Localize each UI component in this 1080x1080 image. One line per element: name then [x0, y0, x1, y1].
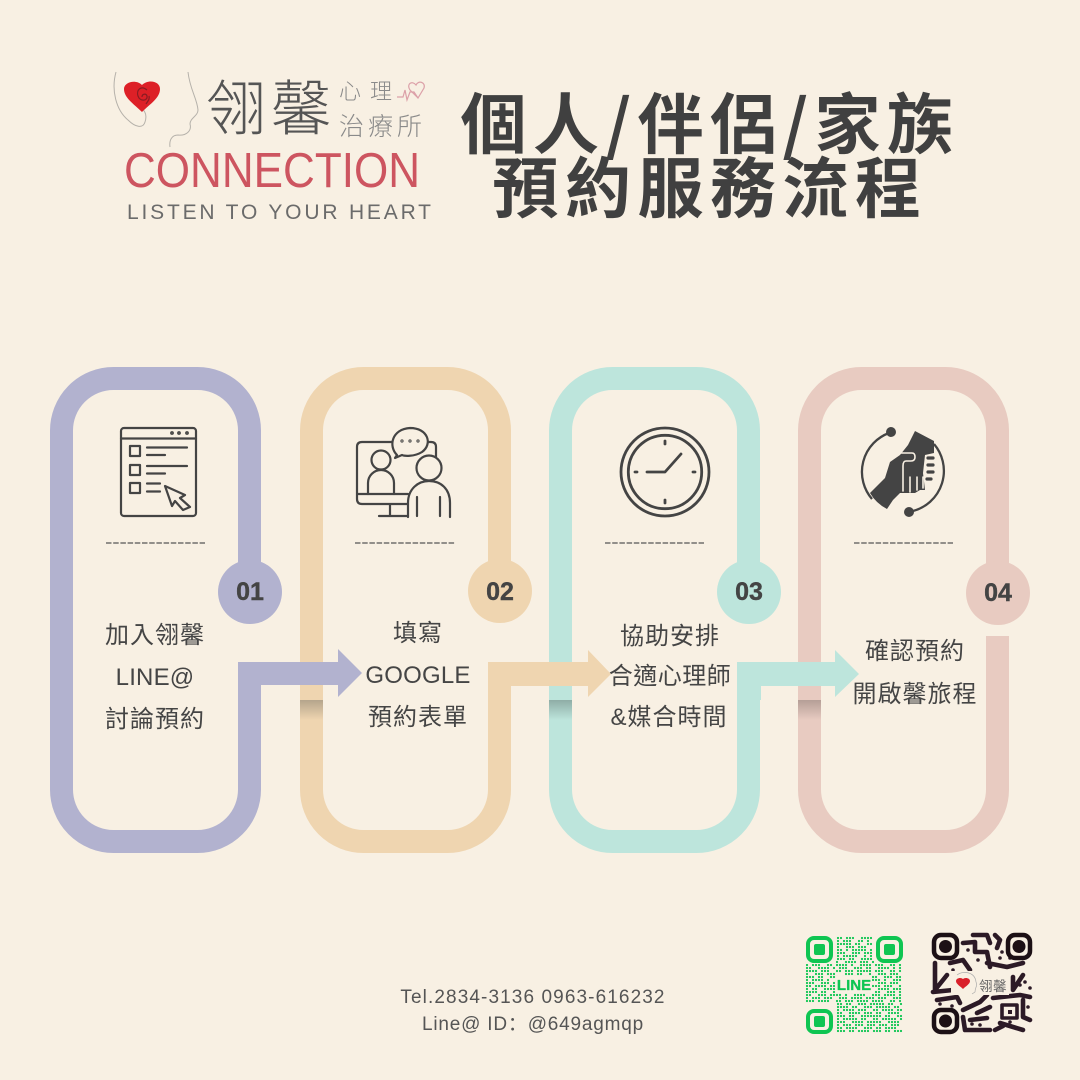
logo name: 翎馨: [206, 61, 336, 148]
arrow: step 3 to 4: [738, 650, 859, 700]
badge 04: 04: [984, 579, 1012, 607]
frame 3: [560, 378, 749, 842]
QR centre logo: 翎馨: [979, 975, 1007, 995]
divider 1: [106, 542, 205, 544]
step 4 text: [852, 638, 978, 708]
icon: head outline: [114, 72, 198, 147]
icon: clock: [621, 428, 709, 516]
step 3 text: 合適心理師: [609, 663, 731, 690]
arrow shadow on frame 3: [549, 700, 572, 720]
icon: red heart: [124, 82, 160, 112]
step 3 text: [609, 623, 731, 731]
arrow: step 1 to 2: [238, 649, 362, 700]
arrow: step 2 to 3: [488, 650, 611, 700]
badge 03: [717, 560, 781, 624]
badge 01: 01: [236, 578, 264, 606]
panel: step 3: [488, 378, 781, 842]
icon: pink heartbeat: [397, 82, 424, 100]
step 2 text: [365, 620, 471, 731]
step 2 text: GOOGLE: [365, 662, 471, 689]
badge 04: [966, 561, 1030, 625]
logo subtitle: psychology: 心理: [339, 74, 401, 106]
line id: Line@ ID：@649agmqp: [422, 1014, 644, 1035]
panel: step 1: [61, 378, 282, 842]
title: [460, 72, 960, 232]
divider 3: [605, 542, 704, 544]
badge 03: 03: [735, 578, 763, 606]
step 3 text: 協助安排: [620, 623, 720, 650]
step 4 text: 開啟馨旅程: [852, 681, 978, 708]
step 2 text: 預約表單: [368, 704, 468, 731]
logo: [114, 61, 431, 224]
title line 1: 個人/伴侶/家族: [460, 72, 960, 168]
LINE label: LINE: [837, 977, 871, 994]
step 1 text: [105, 622, 205, 733]
badge 02: [468, 559, 532, 623]
logo tagline: LISTEN TO YOUR HEART: [127, 201, 431, 224]
title line 2: 預約服務流程: [492, 136, 928, 232]
badge 01: [218, 560, 282, 624]
icon: online form: [121, 428, 196, 516]
panel: step 4: [738, 378, 1030, 842]
badge 02: 02: [486, 578, 514, 606]
phone numbers: Tel.2834-3136 0963-616232: [400, 987, 666, 1008]
divider 4: [854, 542, 953, 544]
arrow shadow on frame 4: [798, 700, 821, 720]
frame 4: [809, 378, 998, 842]
logo subtitle: clinic: 治療所: [339, 107, 426, 143]
icon: helping hands: [862, 427, 944, 517]
step 4 text: 確認預約: [865, 638, 965, 665]
step 1 text: 加入翎馨: [105, 622, 205, 649]
logo wordmark: CONNECTION: [124, 144, 420, 198]
divider 2: [355, 542, 455, 544]
step 3 text: &媒合時間: [610, 704, 728, 731]
contact information: [400, 987, 666, 1035]
step 2 text: 填寫: [393, 620, 443, 647]
QR code: LINE: [806, 936, 904, 1034]
frame 2: [311, 378, 500, 842]
arrow shadow on frame 2: [300, 700, 323, 720]
frame 1: [61, 378, 250, 842]
icon: video consultation: [357, 428, 450, 517]
step 1 text: LINE@: [116, 664, 194, 691]
step 1 text: 討論預約: [105, 706, 205, 733]
QR code: website: [933, 935, 1030, 1032]
panel: step 2: [238, 378, 532, 842]
